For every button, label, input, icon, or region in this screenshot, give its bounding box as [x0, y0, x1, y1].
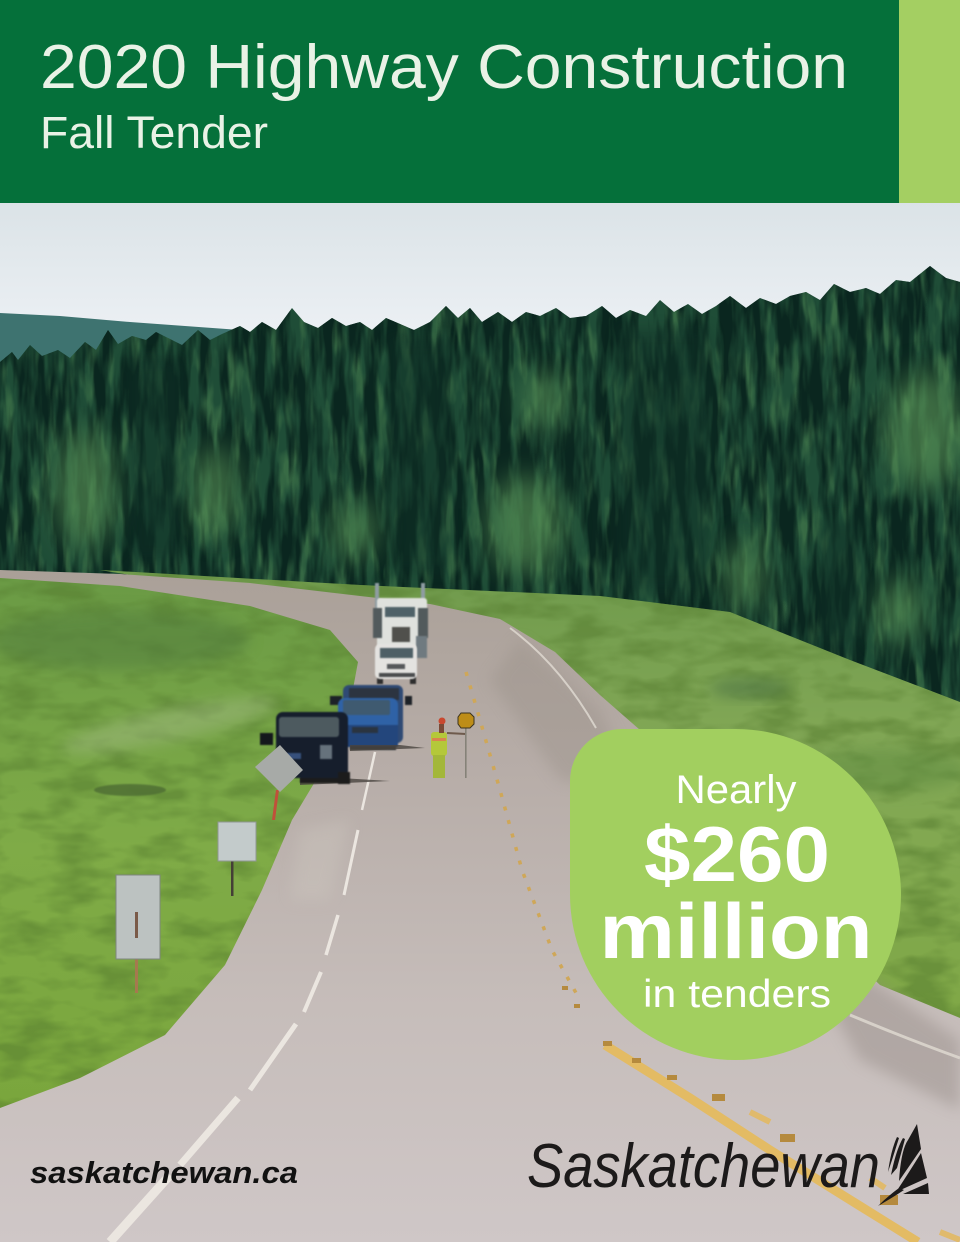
callout: nearly $260 million in tenders [570, 729, 901, 1060]
vehicle: blue SUV [338, 698, 398, 750]
header banner [0, 0, 960, 203]
callout figure: million: million [600, 887, 872, 975]
white lane dashes [110, 752, 375, 1242]
grass: right verge [100, 570, 960, 1018]
vehicle: semi truck [373, 583, 428, 658]
Saskatchewan logo [527, 1124, 929, 1206]
website url: saskatchewan.ca [30, 1155, 298, 1190]
vehicle: white pickup [375, 644, 417, 684]
vehicle: dark police car [260, 712, 350, 784]
header background [0, 0, 899, 203]
title: 2020 Highway Construction [40, 33, 848, 102]
forest [0, 260, 960, 740]
callout text: in tenders: in tenders [643, 973, 831, 1016]
road shading [290, 640, 960, 1110]
road shadow under cars [300, 745, 425, 785]
grass: left verge [0, 575, 380, 1120]
sign: large rectangular [116, 875, 160, 993]
flagger worker with stop/slow paddle [431, 713, 474, 778]
callout bubble [570, 729, 901, 1060]
road edge lines [510, 628, 960, 1058]
yellow centre line [466, 672, 960, 1242]
logo icon: wheat sheaf [878, 1124, 929, 1206]
logo wordmark: Saskatchewan [527, 1132, 880, 1201]
subtitle: Fall Tender [40, 107, 268, 158]
road surface [0, 570, 960, 1242]
sky [0, 203, 960, 373]
distant hill [0, 313, 250, 400]
callout figure: $260: $260 [644, 810, 830, 898]
sign: diamond [255, 745, 303, 820]
vehicle: blue truck [330, 685, 412, 743]
callout text: nearly: Nearly [676, 768, 796, 812]
road reflectors [562, 986, 898, 1205]
sign: small rectangular [218, 822, 256, 896]
header accent block [899, 0, 960, 203]
